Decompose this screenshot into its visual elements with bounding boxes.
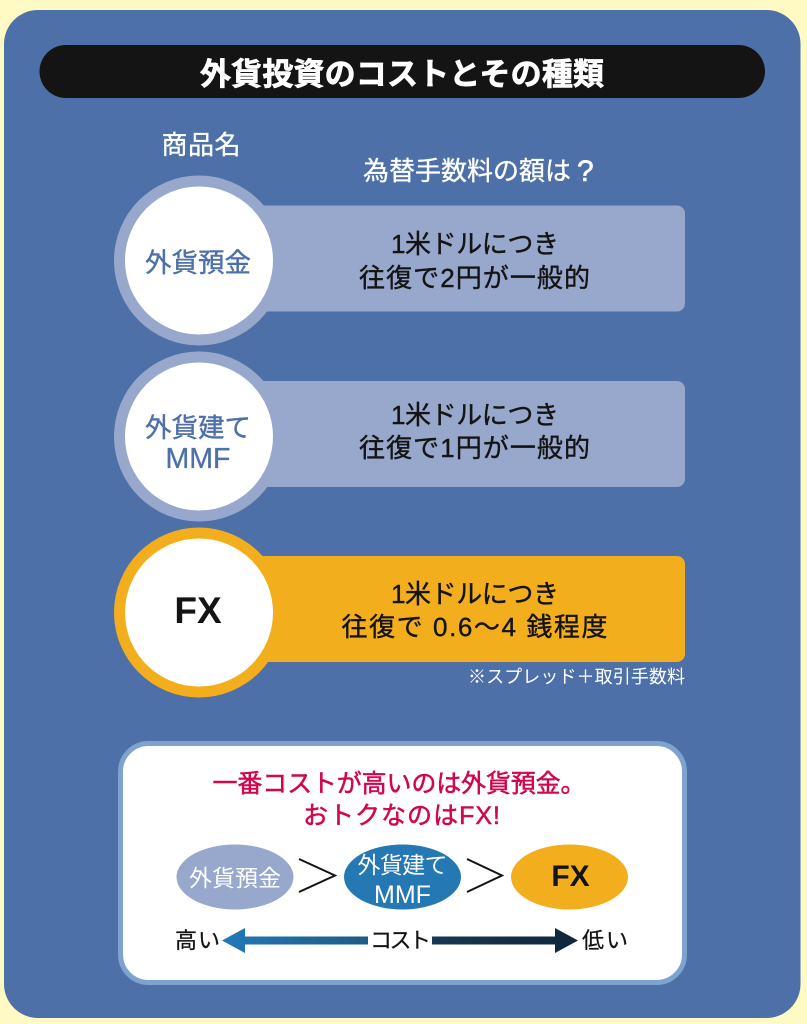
summary headline xyxy=(212,770,586,830)
fee text: 往復で 0.6～4 銭程度 xyxy=(342,612,608,642)
fee text: 往復で2円が一般的 xyxy=(359,263,590,293)
fee text: 1米ドルにつき xyxy=(391,400,559,430)
fee bar xyxy=(240,206,685,312)
product circle xyxy=(114,176,284,346)
icon: greater-than 2 xyxy=(467,859,502,892)
product circle: 外貨預金 xyxy=(145,248,251,278)
ellipse: foreign currency MMF xyxy=(344,844,461,910)
fee text xyxy=(359,400,590,463)
heading: exchange fee amount: ? xyxy=(577,155,594,188)
arrow: cost left xyxy=(222,928,368,953)
product circle: FX xyxy=(174,590,222,631)
title xyxy=(40,45,765,98)
label: high: 高い xyxy=(175,928,220,953)
icon: greater-than 1 xyxy=(299,859,335,892)
fee bar xyxy=(240,556,685,662)
heading: product name: 商品名 xyxy=(162,130,240,160)
title: 外貨投資のコストとその種類 xyxy=(200,57,604,92)
fee text: 1米ドルにつき xyxy=(391,229,559,259)
product circle: 外貨建て xyxy=(145,413,251,443)
fee bar xyxy=(240,381,685,487)
product circle: MMF xyxy=(166,443,230,475)
ellipse: foreign currency deposit: 外貨預金 xyxy=(189,865,281,891)
product circle xyxy=(114,352,284,522)
fee text: 1米ドルにつき xyxy=(391,579,559,609)
ellipse: foreign currency deposit xyxy=(176,844,294,910)
fee text: 往復で1円が一般的 xyxy=(359,433,590,463)
panel: summary xyxy=(120,744,684,982)
heading: exchange fee amount: 為替手数料の額は xyxy=(363,156,571,186)
summary headline: 一番コストが高いのは外貨預金。 xyxy=(212,770,586,798)
panel: foreign currency MMF row xyxy=(114,352,685,522)
note: spread plus fee: ※スプレッド＋取引手数料 xyxy=(468,667,685,687)
label: cost: コスト xyxy=(370,928,431,953)
ellipse: foreign currency MMF: MMF xyxy=(374,881,431,909)
fee text xyxy=(359,229,590,293)
label: low: 低い xyxy=(582,928,628,953)
fee text xyxy=(342,579,608,642)
summary headline: おトクなのはFX! xyxy=(303,802,500,830)
panel: FX row xyxy=(114,528,685,698)
ellipse: FX: FX xyxy=(551,860,590,893)
product circle xyxy=(114,528,284,698)
arrow: cost right xyxy=(432,928,578,953)
ellipse: FX xyxy=(511,844,628,910)
ellipse: foreign currency MMF: 外貨建て xyxy=(358,852,448,878)
panel: foreign currency deposit row xyxy=(114,176,685,346)
